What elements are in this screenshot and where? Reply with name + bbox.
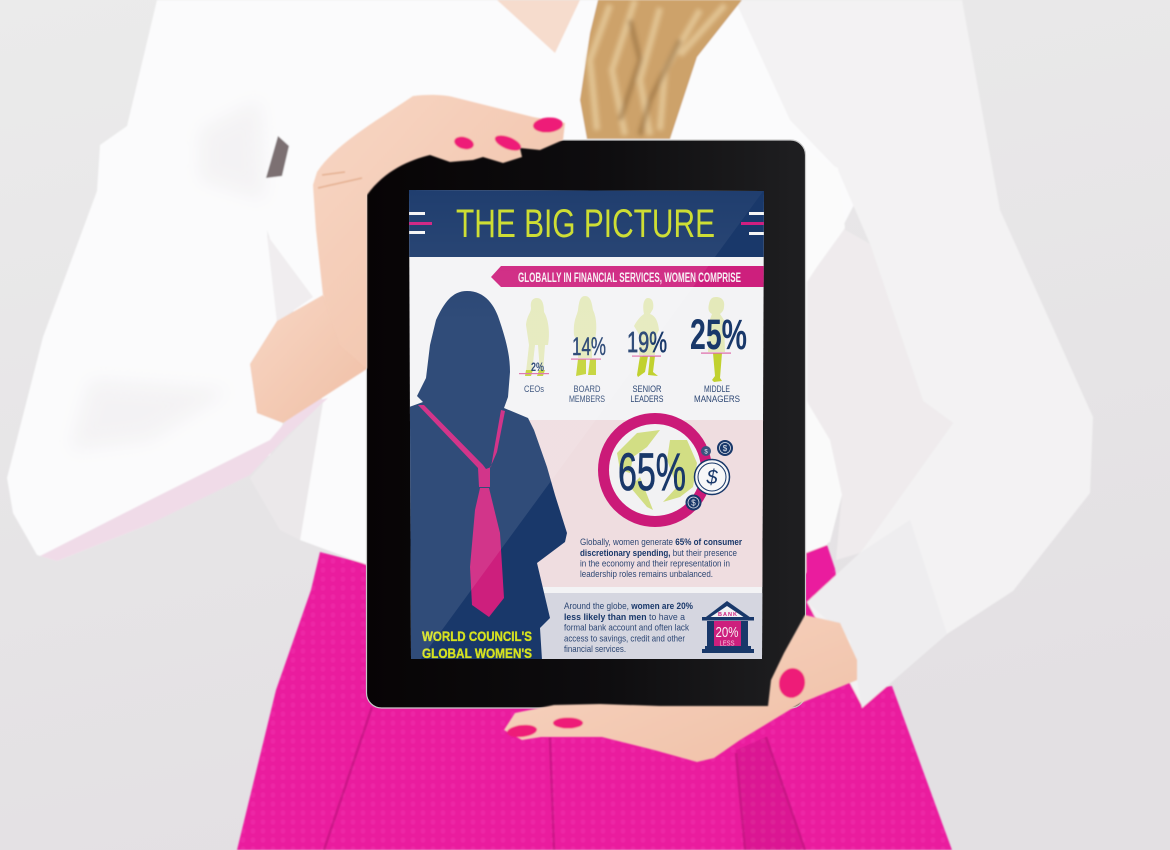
sleeve underside <box>40 398 328 561</box>
text: consumer spending: leadership roles remains unbalanced. <box>580 569 713 579</box>
icon: bank 20% less: LESS <box>720 640 735 648</box>
skirt waist right <box>806 545 835 602</box>
banner: GLOBALLY IN FINANCIAL SERVICES, WOMEN COMPRISE <box>518 270 741 285</box>
figure: senior leaders: LEADERS <box>630 394 664 404</box>
title: THE BIG PICTURE <box>456 202 715 246</box>
hair <box>580 0 742 139</box>
shirt torso <box>157 0 960 580</box>
background below left sleeve <box>250 402 323 540</box>
figure: CEOs: CEOs <box>524 384 544 394</box>
coin top right: $ <box>723 444 728 453</box>
organisation name <box>422 631 532 658</box>
figure: senior leaders: SENIOR <box>632 384 662 394</box>
skirt <box>237 545 952 850</box>
screen glare <box>409 190 764 660</box>
65% label: 65% <box>618 443 686 502</box>
banner <box>491 266 764 287</box>
text: consumer spending: in the economy and their representation in <box>580 558 730 568</box>
chart: 65% globe ring <box>604 418 733 522</box>
figure: CEOs: 2% <box>531 362 544 374</box>
right shoulder <box>735 0 1093 706</box>
figure: board members: 14% <box>572 333 606 361</box>
nails <box>776 666 808 700</box>
organisation name: GLOBAL WOMEN'S <box>422 645 532 661</box>
left sleeve <box>7 0 290 561</box>
screen background <box>409 190 764 660</box>
background gap right <box>807 228 953 560</box>
figure: middle managers: 25% <box>690 311 747 359</box>
lower hand <box>504 615 857 762</box>
panel: bank access <box>530 593 764 660</box>
sleeve fold shading <box>70 100 265 450</box>
tablet <box>366 140 806 708</box>
icon: bank 20% less <box>702 601 754 653</box>
header stripes right <box>741 212 764 235</box>
text: bank access: formal bank account and often lack <box>564 622 689 632</box>
coin large: $ <box>705 467 718 489</box>
neck <box>497 0 580 53</box>
text: bank access: financial services. <box>564 644 626 654</box>
figure: senior leaders <box>627 298 667 404</box>
header stripes left <box>409 212 432 234</box>
shirt fold <box>266 136 289 178</box>
upper hand <box>313 95 565 369</box>
figure: senior leaders: 19% <box>627 327 667 359</box>
figure: middle managers: MANAGERS <box>694 394 740 404</box>
hands <box>313 95 857 762</box>
figure: board members <box>569 296 606 404</box>
tablet screen infographic <box>409 190 764 661</box>
figure: CEOs <box>519 298 549 394</box>
text: bank access: less likely than men to have a <box>564 612 686 622</box>
text: consumer spending: discretionary spending, but their presence <box>580 548 737 558</box>
organisation name: WORLD COUNCIL'S <box>422 628 532 644</box>
text: consumer spending: Globally, women generate 65% of consumer <box>580 537 742 547</box>
text: bank access: access to savings, credit and other <box>564 634 685 644</box>
text: bank access <box>564 601 694 654</box>
left forearm <box>250 295 367 423</box>
text: bank access: Around the globe, women are 20% <box>564 601 694 611</box>
panel: consumer spending <box>520 420 764 587</box>
coin bottom: $ <box>691 498 696 508</box>
globe continents <box>617 430 697 510</box>
figure: board members: BOARD <box>574 384 601 394</box>
right sleeve cuff <box>807 520 947 708</box>
nails <box>533 116 563 134</box>
panel: header <box>409 190 764 257</box>
tie <box>418 405 505 617</box>
chart: women in leadership figures <box>519 296 747 404</box>
coin small: $ <box>704 450 708 456</box>
figure: board members: MEMBERS <box>569 394 605 404</box>
icon: bank 20% less: 20% <box>716 624 738 641</box>
silhouette: woman with tie <box>409 291 567 661</box>
icon: bank 20% less: BANK <box>718 612 737 618</box>
background gap left <box>267 235 313 322</box>
shirt knot right <box>800 150 845 282</box>
text: consumer spending <box>580 537 742 579</box>
figure: middle managers: MIDDLE <box>704 384 730 394</box>
figure: middle managers <box>690 297 747 404</box>
shirt torso fragment right <box>806 400 842 553</box>
